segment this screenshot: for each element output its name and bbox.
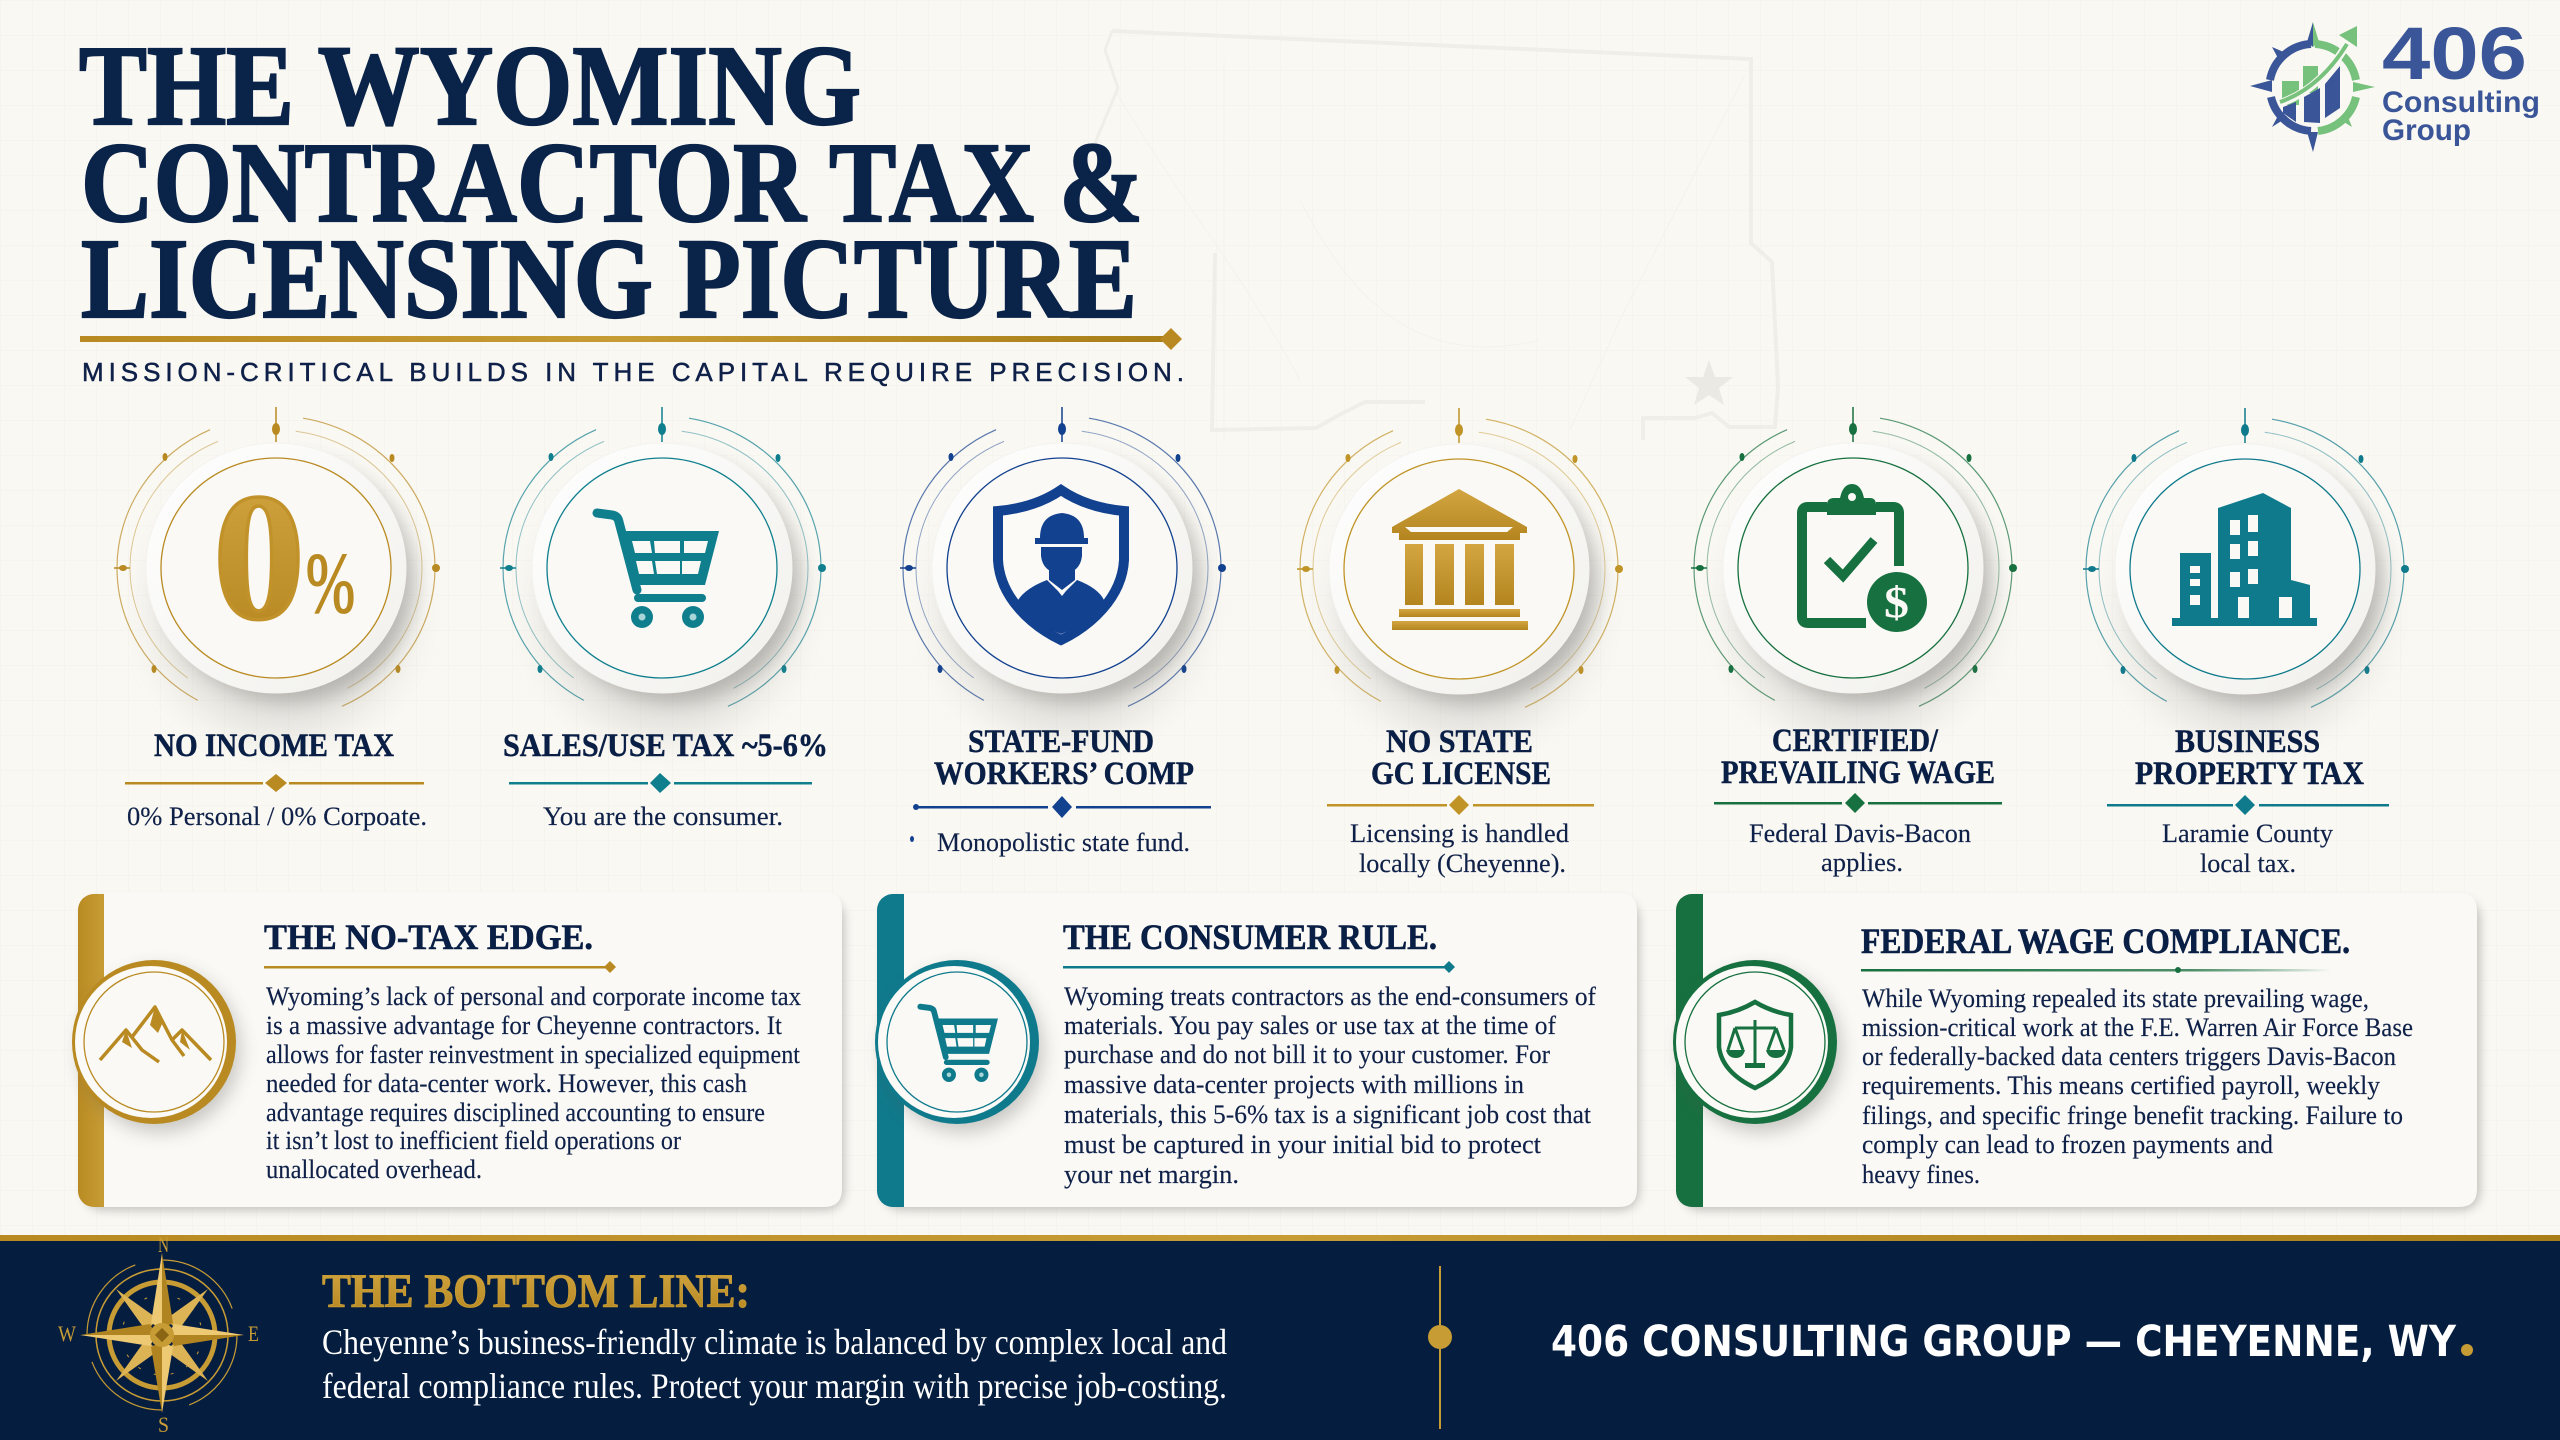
- logo text: [2382, 12, 2540, 147]
- heading: THE CONSUMER RULE.: [1063, 917, 1437, 957]
- description: Licensing is handled: [1350, 819, 1569, 848]
- body text: Wyoming’s lack of personal and corporate income tax: [266, 982, 801, 1011]
- body text: allows for faster reinvestment in specialized equipment: [266, 1040, 801, 1069]
- watermark: Wyoming map outline: [1095, 31, 1778, 440]
- icon: clipboard with dollar medallion: [1691, 407, 2017, 733]
- description: [1749, 819, 1971, 877]
- panel: state-fund workers comp: [900, 407, 1226, 857]
- heading: GC LICENSE: [1371, 756, 1551, 792]
- body text: filings, and specific fringe benefit tracking. Failure to: [1862, 1101, 2403, 1130]
- body text: it isn’t lost to inefficient field operations or: [266, 1126, 681, 1155]
- divider: [913, 796, 1211, 818]
- heading rule: [1063, 961, 1455, 973]
- icon: cart medallion: [875, 960, 1043, 1132]
- description: locally (Cheyenne).: [1359, 849, 1566, 878]
- heading: CERTIFIED/: [1772, 723, 1939, 759]
- body text: [1064, 982, 1596, 1189]
- icon: shopping cart medallion: [500, 407, 826, 733]
- title rule with diamond: [80, 328, 1182, 350]
- bottom line text: Cheyenne’s business-friendly climate is balanced by complex local and: [322, 1322, 1227, 1362]
- body text: requirements. This means certified payroll, weekly: [1862, 1071, 2380, 1100]
- heading rule: [264, 961, 616, 973]
- icon: mountain medallion: [72, 960, 240, 1132]
- logo: 406 Consulting Group: [2250, 12, 2540, 152]
- bottom line text: [322, 1322, 1227, 1406]
- icon: shield with worker medallion: [900, 407, 1226, 733]
- icon: clipboard with dollar medallion: $: [1884, 578, 1909, 627]
- body text: heavy fines.: [1862, 1160, 1980, 1189]
- subtitle: MISSION-CRITICAL BUILDS IN THE CAPITAL REQUIRE PRECISION.: [82, 357, 1184, 387]
- title: LICENSING PICTURE: [81, 215, 1137, 342]
- icon: courthouse medallion: [1297, 408, 1623, 734]
- description: 0% Personal / 0% Corpoate.: [127, 802, 427, 831]
- description: You are the consumer.: [543, 802, 783, 831]
- divider: [1327, 795, 1594, 815]
- body text: materials. You pay sales or use tax at the time of: [1064, 1011, 1556, 1040]
- panel: certified prevailing wage: [1691, 407, 2017, 877]
- body text: [266, 982, 801, 1184]
- title: [79, 22, 1143, 342]
- bottom line heading: THE BOTTOM LINE:: [322, 1265, 750, 1318]
- heading: SALES/USE TAX ~5-6%: [503, 728, 828, 764]
- description: [2162, 819, 2333, 878]
- heading: FEDERAL WAGE COMPLIANCE.: [1861, 921, 2350, 961]
- panel: business property tax: [2083, 408, 2409, 878]
- card: the consumer rule: [875, 893, 1639, 1210]
- body text: massive data-center projects with millions in: [1064, 1070, 1524, 1099]
- body text: mission-critical work at the F.E. Warren Air Force Base: [1862, 1013, 2413, 1042]
- description: [1350, 819, 1569, 878]
- icon: 0 percent medallion: [114, 407, 440, 733]
- icon: compass rose: [58, 1232, 259, 1437]
- heading: NO STATE: [1386, 724, 1533, 760]
- card: the no-tax edge: [72, 892, 844, 1210]
- body text: or federally-backed data centers triggers Davis-Bacon: [1862, 1042, 2396, 1071]
- body text: advantage requires disciplined accounting to ensure: [266, 1098, 765, 1127]
- description: Monopolistic state fund.: [937, 828, 1190, 857]
- heading: BUSINESS: [2175, 724, 2320, 760]
- body text: materials, this 5-6% tax is a significant job cost that: [1064, 1100, 1592, 1129]
- heading: WORKERS’ COMP: [934, 756, 1194, 792]
- body text: comply can lead to frozen payments and: [1862, 1130, 2273, 1159]
- icon: compass rose: E: [248, 1321, 259, 1346]
- icon: office buildings medallion: [2083, 408, 2409, 734]
- description: Laramie County: [2162, 819, 2333, 848]
- panel: no state GC license: [1297, 408, 1623, 878]
- bottom line text: federal compliance rules. Protect your margin with precise job-costing.: [322, 1366, 1227, 1406]
- logo text: 406: [2382, 12, 2527, 95]
- heading: [1371, 724, 1551, 792]
- icon: shield with scales medallion: [1673, 960, 1841, 1132]
- heading: THE NO-TAX EDGE.: [264, 917, 593, 957]
- heading: NO INCOME TAX: [154, 728, 394, 764]
- body text: must be captured in your initial bid to protect: [1064, 1130, 1542, 1159]
- body text: While Wyoming repealed its state prevailing wage,: [1862, 984, 2369, 1013]
- card body: [78, 892, 844, 1210]
- logo text: Consulting: [2382, 86, 2540, 119]
- body text: Wyoming treats contractors as the end-consumers of: [1064, 982, 1596, 1011]
- company sign-off: 406 CONSULTING GROUP — CHEYENNE, WY: [1551, 1317, 2457, 1367]
- body text: purchase and do not bill it to your customer. For: [1064, 1040, 1550, 1069]
- divider: [1714, 793, 2002, 813]
- heading: PROPERTY TAX: [2135, 756, 2364, 792]
- heading rule: [1861, 967, 2331, 973]
- heading: [2135, 724, 2364, 792]
- body text: unallocated overhead.: [266, 1155, 482, 1184]
- icon: compass rose: S: [158, 1412, 169, 1437]
- card body: [877, 893, 1639, 1210]
- card: federal wage compliance: [1673, 893, 2480, 1210]
- description: applies.: [1821, 848, 1903, 877]
- description: local tax.: [2200, 849, 2296, 878]
- logo compass mark: [2250, 22, 2375, 152]
- icon: 0 percent medallion: 0: [213, 457, 305, 658]
- title: THE WYOMING: [79, 22, 861, 149]
- heading: [1721, 723, 1995, 791]
- divider: [125, 774, 424, 792]
- title: CONTRACTOR TAX &: [81, 119, 1143, 246]
- logo text: Group: [2382, 114, 2471, 147]
- divider: [509, 773, 812, 793]
- icon: compass rose: N: [158, 1232, 169, 1257]
- vertical divider with dot: [1428, 1266, 1452, 1429]
- panel: no income tax: [114, 407, 440, 831]
- panel: sales and use tax: [500, 407, 828, 831]
- footer band: [0, 1232, 2560, 1440]
- description: Federal Davis-Bacon: [1749, 819, 1971, 848]
- divider: [2107, 795, 2389, 815]
- body text: your net margin.: [1064, 1160, 1239, 1189]
- icon: 0 percent medallion: %: [306, 535, 355, 631]
- heading: [934, 724, 1194, 792]
- heading: STATE-FUND: [968, 724, 1154, 760]
- heading: PREVAILING WAGE: [1721, 755, 1995, 791]
- icon: compass rose: W: [58, 1321, 76, 1346]
- card body: [1676, 893, 2480, 1210]
- body text: [1862, 984, 2413, 1189]
- body text: is a massive advantage for Cheyenne contractors. It: [266, 1011, 783, 1040]
- body text: needed for data-center work. However, this cash: [266, 1069, 747, 1098]
